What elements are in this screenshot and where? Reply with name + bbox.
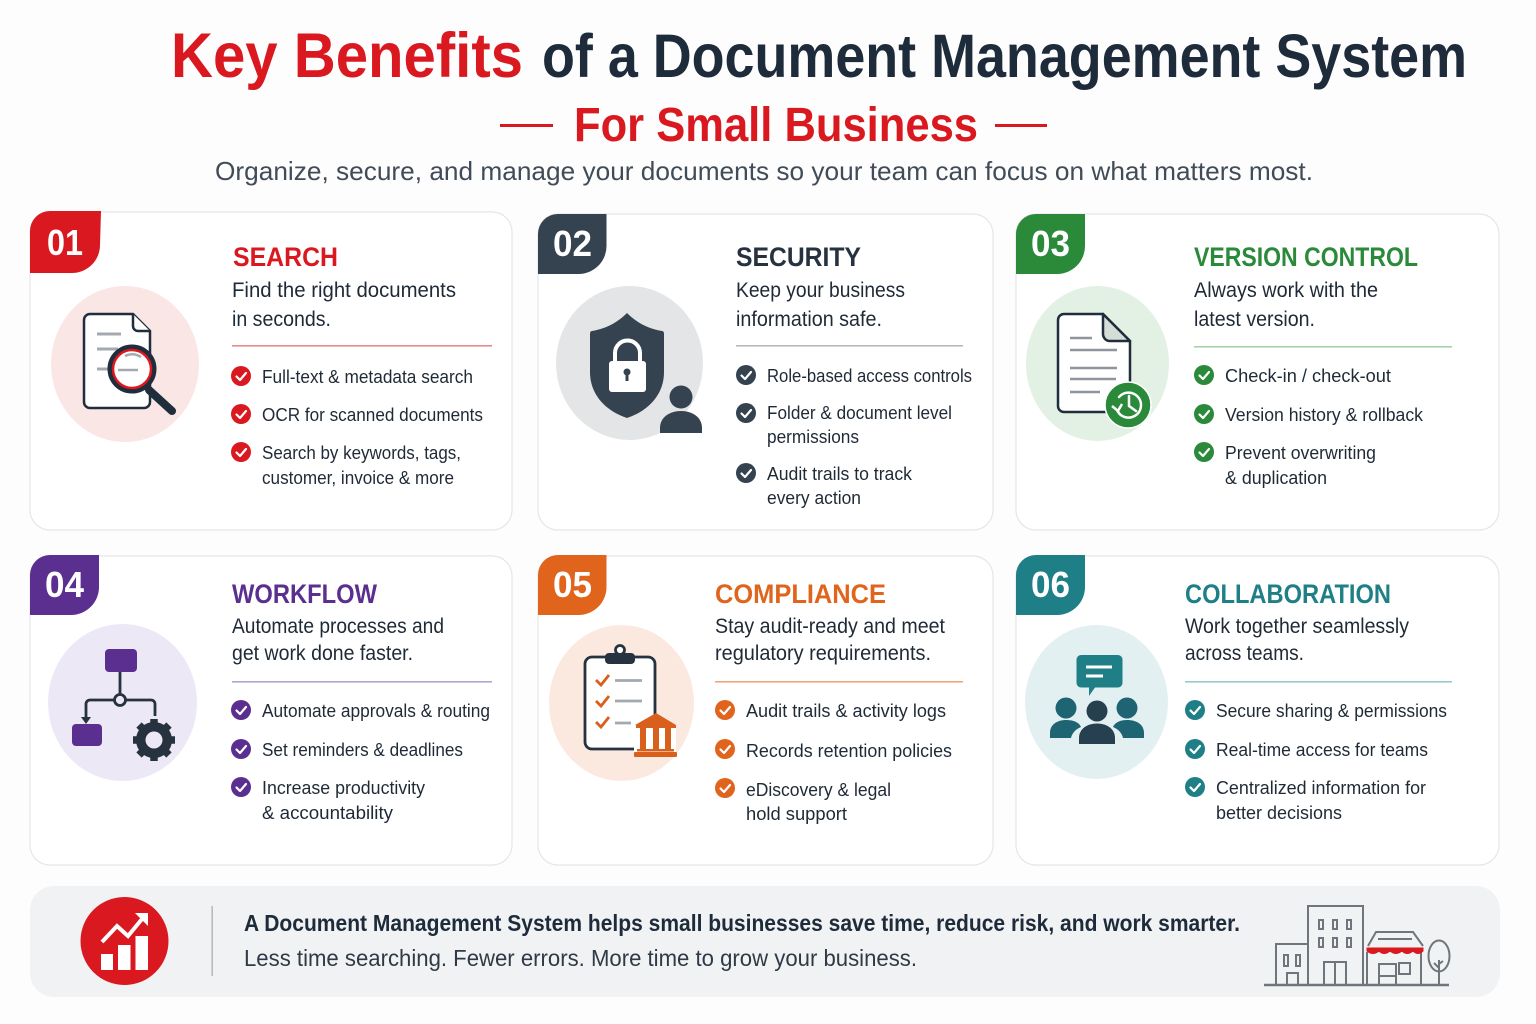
bullet list: [1194, 365, 1424, 488]
bullet list: [231, 700, 490, 823]
bullet list: Centralized information for: [1216, 778, 1426, 798]
bullet list: permissions: [767, 427, 859, 447]
badge 04: 04: [45, 564, 84, 605]
description: Find the right documents: [232, 279, 456, 302]
badge 03: 03: [1031, 223, 1070, 264]
footer text: [244, 910, 1240, 971]
description: [1185, 615, 1409, 665]
description: Automate processes and: [232, 615, 444, 638]
badge 02: 02: [553, 223, 592, 264]
badge 06: 06: [1031, 564, 1070, 605]
footer text: A Document Management System helps small businesses save time, reduce risk, and work smarter.: [244, 910, 1240, 936]
bullet list: Prevent overwriting: [1225, 443, 1376, 463]
badge 01: 01: [47, 222, 83, 263]
badge 04: [30, 555, 99, 615]
description: in seconds.: [232, 308, 331, 331]
description: Keep your business: [736, 279, 905, 302]
description: [736, 279, 905, 331]
panel: 05 compliance: [538, 555, 993, 865]
icon: workflow diagram with gear: [48, 624, 197, 781]
badge 02: [538, 214, 606, 274]
bullet list: Increase productivity: [262, 778, 425, 798]
bullet list: eDiscovery & legal: [746, 780, 891, 800]
title: [171, 21, 1467, 91]
icon: document with history clock: [1026, 286, 1169, 441]
bullet list: Secure sharing & permissions: [1216, 701, 1447, 721]
subtitle: For Small Business: [574, 99, 978, 152]
bullet list: Role-based access controls: [767, 366, 972, 386]
bullet list: Real-time access for teams: [1216, 740, 1428, 760]
description: information safe.: [736, 308, 882, 331]
panel: 02 security: [538, 214, 993, 530]
panel: 04 workflow: [30, 555, 512, 865]
tagline: Organize, secure, and manage your documents so your team can focus on what matters most.: [215, 156, 1313, 186]
badge 05: 05: [553, 564, 592, 605]
panel: 01 search: [30, 211, 512, 530]
bullet list: [736, 365, 972, 508]
badge 03: [1016, 214, 1085, 274]
bullet list: hold support: [746, 804, 847, 824]
bullet list: Folder & document level: [767, 403, 952, 423]
bullet list: Audit trails & activity logs: [746, 701, 946, 721]
description: regulatory requirements.: [715, 642, 931, 665]
bullet list: [1185, 700, 1447, 823]
bullet list: Set reminders & deadlines: [262, 740, 463, 760]
icon: growth chart: [80, 897, 168, 985]
badge 06: [1016, 555, 1085, 615]
bullet list: [231, 366, 483, 488]
heading: search: SEARCH: [233, 242, 338, 272]
bullet list: & duplication: [1225, 468, 1327, 488]
badge 01: [30, 211, 101, 273]
description: [232, 615, 444, 665]
bullet list: & accountability: [262, 803, 393, 823]
description: [1194, 279, 1378, 331]
description: Stay audit-ready and meet: [715, 615, 945, 638]
description: [232, 279, 456, 331]
footer text: Less time searching. Fewer errors. More time to grow your business.: [244, 945, 917, 971]
icon: team with chat bubble: [1025, 625, 1168, 779]
bullet list: Automate approvals & routing: [262, 701, 490, 721]
icon: clipboard with courthouse: [549, 625, 694, 781]
bullet list: Check-in / check-out: [1225, 366, 1391, 386]
bullet list: OCR for scanned documents: [262, 405, 483, 425]
icon: small business buildings: [1264, 906, 1450, 985]
bullet list: Records retention policies: [746, 741, 952, 761]
description: across teams.: [1185, 642, 1304, 665]
bullet list: Version history & rollback: [1225, 405, 1424, 425]
panel: 06 collaboration: [1016, 555, 1499, 865]
heading: compliance: COMPLIANCE: [715, 579, 886, 609]
heading: version control: VERSION CONTROL: [1194, 242, 1418, 272]
badge 05: [538, 555, 606, 615]
title: Key Benefits: [171, 21, 523, 91]
bullet list: every action: [767, 488, 861, 508]
description: Work together seamlessly: [1185, 615, 1409, 638]
description: Always work with the: [1194, 279, 1378, 302]
heading: collaboration: COLLABORATION: [1185, 579, 1391, 609]
bullet list: Audit trails to track: [767, 464, 913, 484]
heading: workflow: WORKFLOW: [232, 579, 377, 609]
panel: footer banner: [30, 886, 1500, 997]
bullet list: Search by keywords, tags,: [262, 443, 461, 463]
bullet list: [715, 700, 952, 824]
panel: 03 version control: [1016, 214, 1499, 530]
heading: security: SECURITY: [736, 242, 861, 272]
description: get work done faster.: [232, 642, 413, 665]
description: [715, 615, 945, 665]
icon: shield with lock and user: [556, 286, 703, 440]
bullet list: Full-text & metadata search: [262, 367, 473, 387]
bullet list: better decisions: [1216, 803, 1342, 823]
description: latest version.: [1194, 308, 1315, 331]
icon: document with magnifier: [51, 286, 199, 442]
bullet list: customer, invoice & more: [262, 468, 454, 488]
